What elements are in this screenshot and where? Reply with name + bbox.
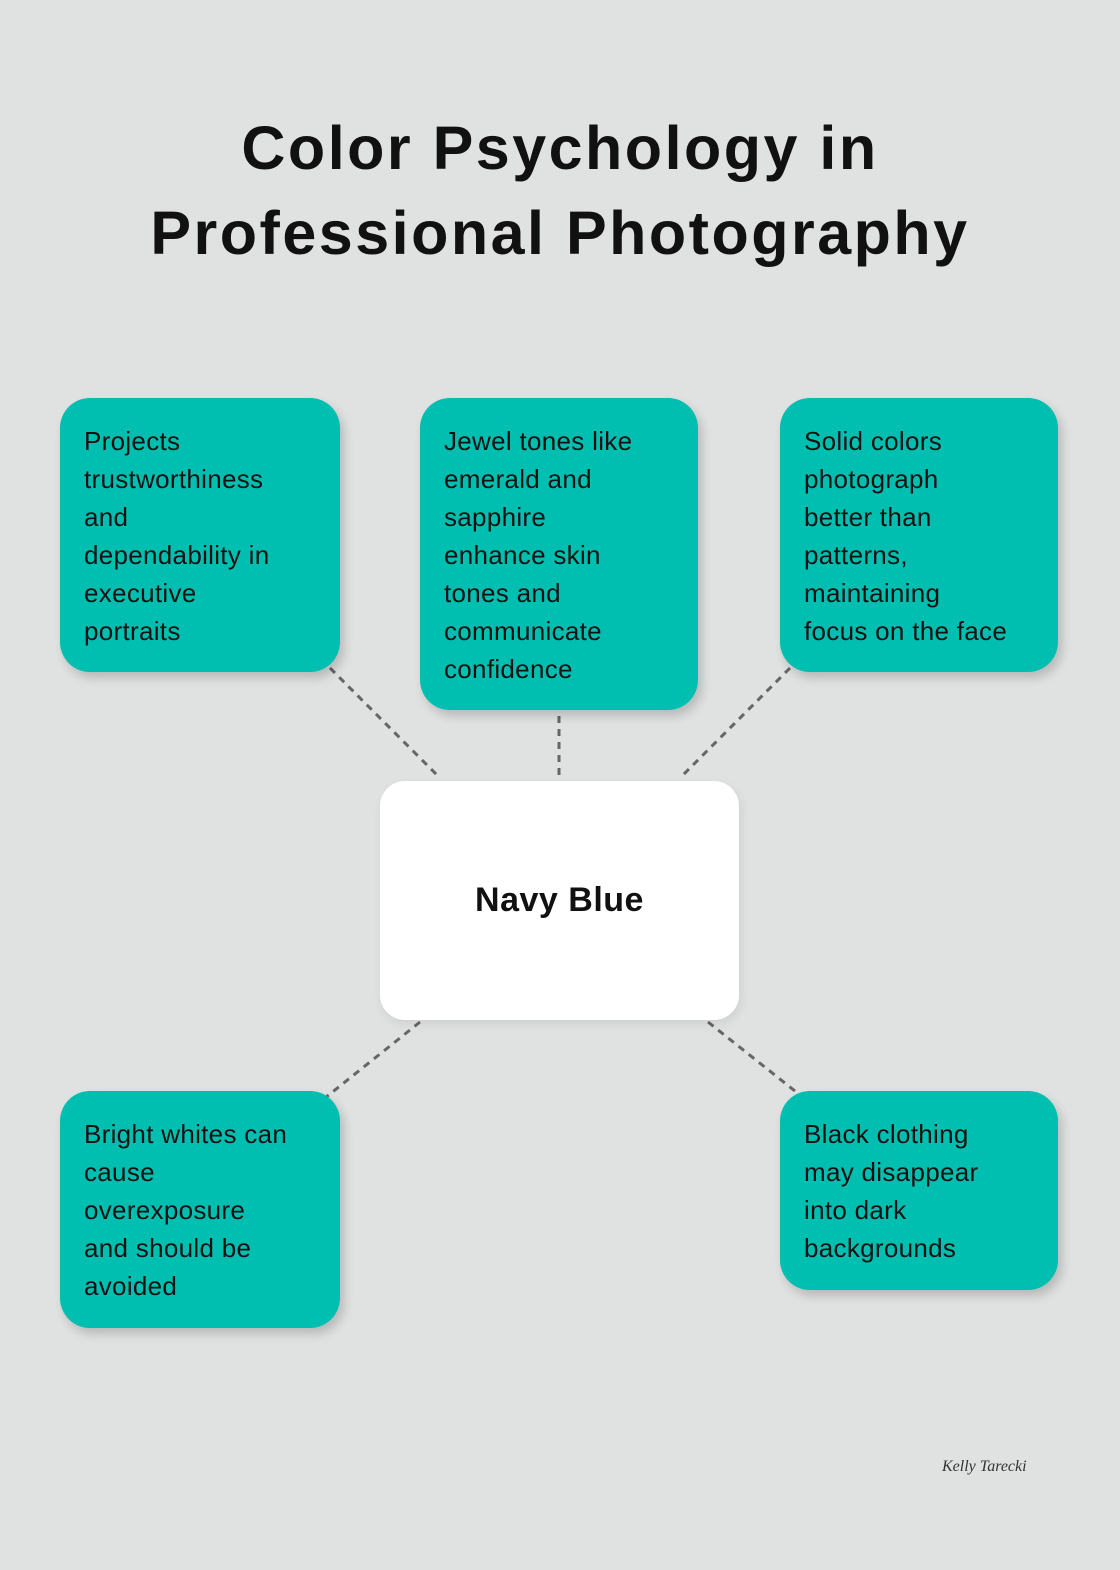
box: trustworthiness: portraits	[84, 616, 181, 646]
box: bright whites: overexposure	[84, 1195, 245, 1225]
box: solid colors: maintaining	[804, 578, 940, 608]
box: jewel tones: tones and	[444, 578, 561, 608]
title: Color Psychology in	[241, 114, 879, 182]
box: trustworthiness: executive	[84, 578, 197, 608]
box: bright whites: and should be	[84, 1233, 251, 1263]
title	[150, 114, 970, 267]
box: bright whites: Bright whites can	[84, 1119, 287, 1149]
box: trustworthiness: and	[84, 502, 128, 532]
box: black clothing: backgrounds	[804, 1233, 956, 1263]
logo: Kelly Tarecki	[942, 1458, 1027, 1475]
box: solid colors	[780, 398, 1058, 672]
box: black clothing	[780, 1091, 1058, 1290]
box: trustworthiness	[60, 398, 340, 672]
box: solid colors: better than	[804, 502, 932, 532]
box: bright whites: cause	[84, 1157, 155, 1187]
box: solid colors: patterns,	[804, 540, 908, 570]
box: trustworthiness: Projects	[84, 426, 180, 456]
box: trustworthiness: trustworthiness	[84, 464, 263, 494]
box: bright whites: avoided	[84, 1271, 177, 1301]
box: jewel tones: confidence	[444, 654, 573, 684]
box: trustworthiness: dependability in	[84, 540, 270, 570]
box: jewel tones: emerald and	[444, 464, 592, 494]
box: solid colors: photograph	[804, 464, 939, 494]
box: solid colors: Solid colors	[804, 426, 942, 456]
box: jewel tones: communicate	[444, 616, 602, 646]
title: Professional Photography	[150, 199, 970, 267]
box: black clothing: Black clothing	[804, 1119, 969, 1149]
box: jewel tones: Jewel tones like	[444, 426, 632, 456]
box: jewel tones	[420, 398, 698, 710]
center: Navy Blue	[380, 781, 739, 1020]
box: black clothing: into dark	[804, 1195, 906, 1225]
box: bright whites	[60, 1091, 340, 1328]
box: solid colors: focus on the face	[804, 616, 1007, 646]
box: jewel tones: sapphire	[444, 502, 546, 532]
center: Navy Blue: Navy Blue	[475, 881, 644, 919]
box: black clothing: may disappear	[804, 1157, 978, 1187]
box: jewel tones: enhance skin	[444, 540, 601, 570]
